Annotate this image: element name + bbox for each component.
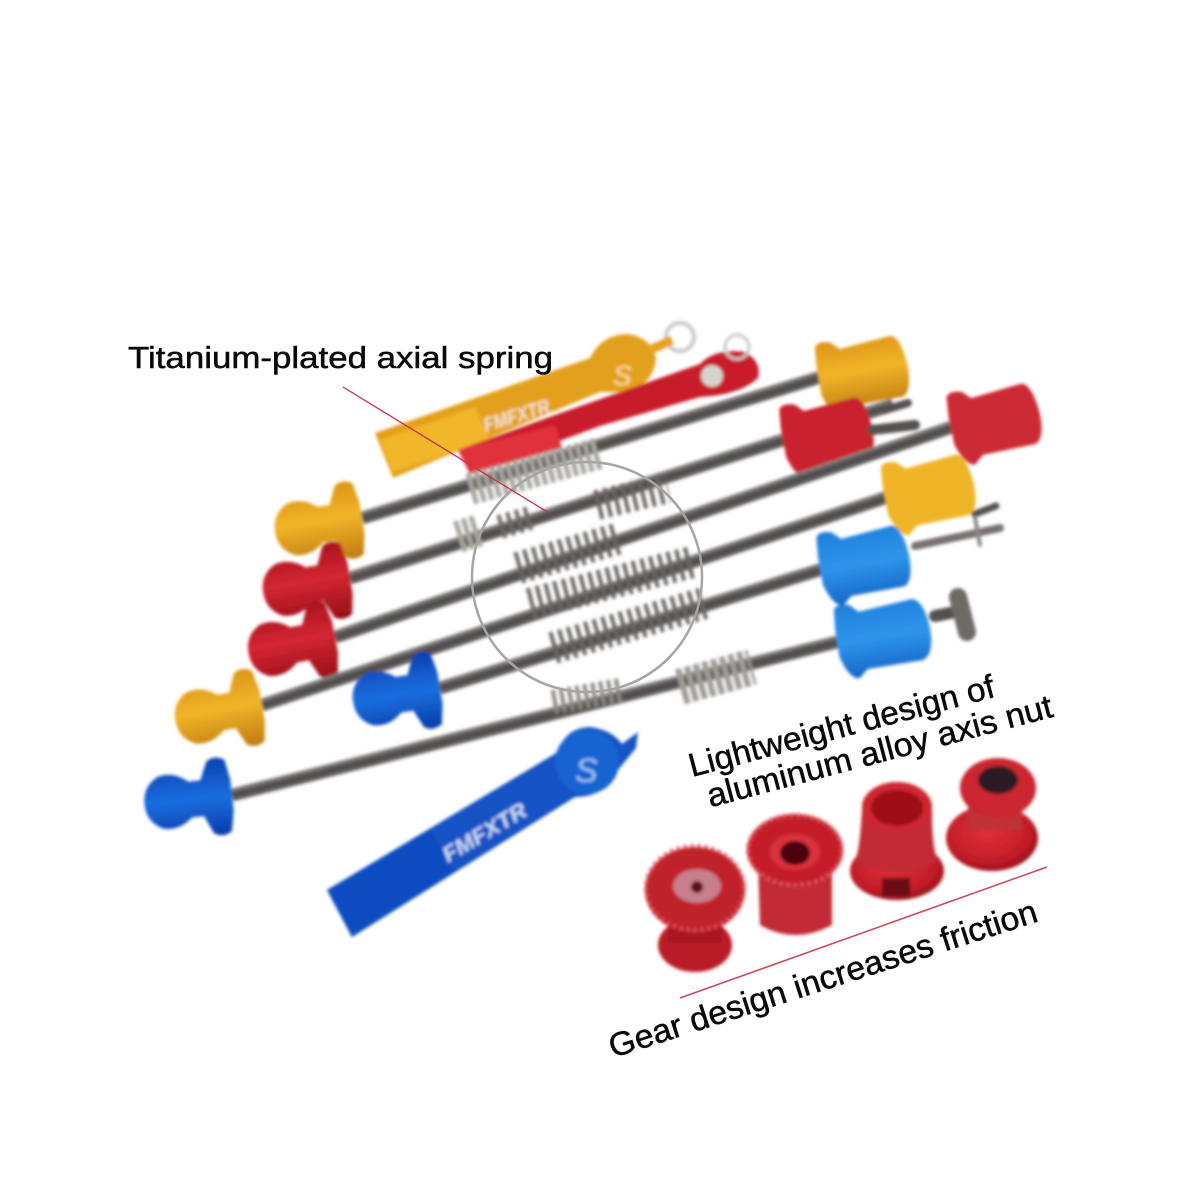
nuts: aluminum alloy axis nuts	[645, 758, 1038, 972]
lever: blue: S	[575, 752, 598, 790]
nut 2	[747, 814, 843, 935]
skewer 3: red	[231, 349, 1056, 716]
label: lightweight design: aluminum alloy axis nut	[703, 687, 1056, 814]
lever: blue	[327, 727, 638, 937]
axial springs	[458, 453, 752, 702]
nut 4	[946, 758, 1038, 871]
lever: red: FMFXTR	[481, 396, 553, 437]
product photo: quick release skewers	[130, 302, 1056, 937]
label: gear design: Gear design increases friction	[604, 892, 1042, 1065]
lever: gold	[375, 323, 694, 478]
label: lightweight design: Lightweight design of	[684, 667, 999, 784]
lever: blue: FMFXTR	[438, 797, 531, 867]
bolt tips behind caps	[872, 403, 1000, 632]
nut 3	[850, 782, 944, 900]
lever: red	[458, 335, 759, 474]
skewer 1: gold	[259, 302, 923, 595]
nut 1	[645, 846, 745, 972]
skewer 6: blue	[130, 569, 943, 864]
callout line: spring	[343, 387, 549, 513]
label: spring: Titanium-plated axial spring	[128, 340, 553, 375]
magnifier circle	[472, 462, 702, 692]
skewer 4: gold	[158, 420, 990, 784]
label: lightweight design	[684, 655, 1056, 817]
skewer 2: red	[246, 356, 909, 656]
lever: gold: S	[613, 360, 632, 391]
skewer 5: blue	[336, 493, 925, 763]
divider line: gear	[680, 867, 1047, 998]
